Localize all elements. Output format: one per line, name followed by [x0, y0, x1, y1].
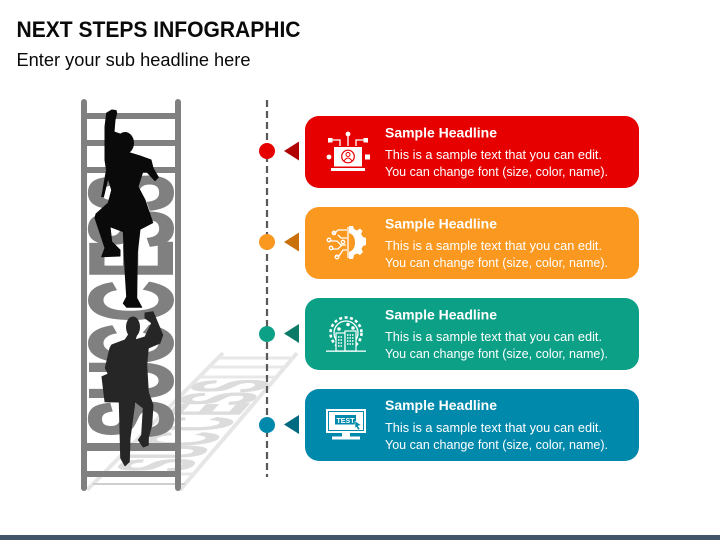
timeline dashed line: [266, 100, 268, 477]
panel: step 1: [305, 116, 639, 188]
step 1 text: [385, 124, 608, 179]
panel: step 4: [305, 389, 639, 461]
step 1 text: This is a sample text that you can edit.: [385, 148, 602, 162]
step 4 text: [385, 397, 608, 452]
timeline marker 4: [259, 415, 299, 434]
ladder with success lettering: [65, 99, 197, 491]
step 4 text: This is a sample text that you can edit.: [385, 421, 602, 435]
ladder with success lettering: C: [65, 324, 197, 365]
ladder with success lettering: C: [65, 281, 197, 322]
title: NEXT STEPS INFOGRAPHIC: [16, 17, 300, 42]
step 2 text: [385, 216, 608, 270]
step 2 text: Sample Headline: [385, 216, 497, 232]
panel: step 3: [305, 298, 639, 370]
icon: smart city gear: [326, 318, 366, 352]
timeline marker 2: [259, 232, 299, 252]
ladder shadow: S: [93, 458, 222, 472]
icon: test monitor: TEST: [336, 416, 355, 425]
ladder shadow: C: [131, 417, 260, 431]
step 2 text: You can change font (size, color, name).: [385, 256, 608, 270]
timeline marker 1: [259, 142, 299, 160]
step 4 text: Sample Headline: [385, 397, 497, 413]
icon: gear with circuits: [327, 226, 366, 259]
ladder shadow: S: [166, 379, 295, 393]
icon: test monitor: [326, 409, 366, 440]
step 3 text: This is a sample text that you can edit.: [385, 330, 602, 344]
step 3 text: You can change font (size, color, name).: [385, 347, 608, 361]
timeline marker 3: [259, 324, 299, 343]
panel: step 2: [305, 207, 639, 279]
subtitle: Enter your sub headline here: [16, 50, 250, 70]
ladder shadow: E: [145, 403, 273, 416]
ladder shadow: C: [117, 432, 246, 446]
ladder with success lettering: U: [65, 360, 197, 401]
ladder with success lettering: S: [65, 210, 197, 248]
step 1 text: You can change font (size, color, name).: [385, 165, 608, 179]
ladder with success lettering: E: [65, 240, 197, 278]
step 1 text: Sample Headline: [385, 124, 497, 140]
step 4 text: You can change font (size, color, name).: [385, 438, 608, 452]
silhouette: woman climbing: [95, 110, 158, 307]
ladder shadow: U: [105, 444, 235, 459]
ladder with success lettering: S: [65, 174, 197, 212]
step 2 text: This is a sample text that you can edit.: [385, 239, 602, 253]
step 3 text: Sample Headline: [385, 306, 497, 322]
bottom bar: [0, 535, 720, 540]
ladder shadow: [87, 353, 297, 490]
icon: laptop with user network: [327, 132, 370, 171]
ladder with success lettering: S: [65, 400, 197, 438]
silhouette: businessman climbing: [102, 312, 163, 466]
ladder shadow: S: [154, 392, 283, 405]
step 3 text: [385, 306, 608, 361]
